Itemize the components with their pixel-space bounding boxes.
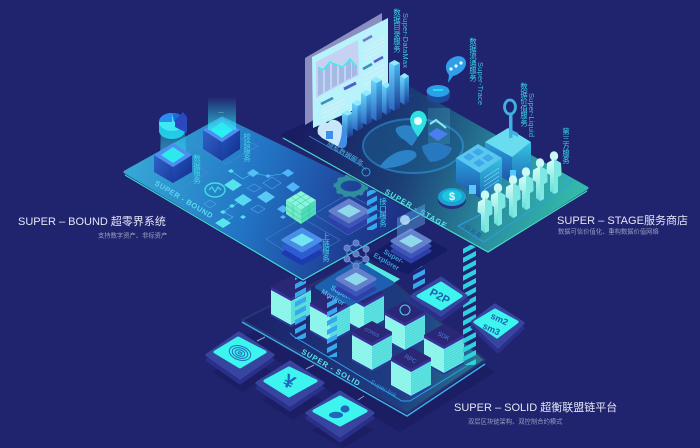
server 1 — [271, 276, 311, 327]
label: 接口服务: 口 — [379, 204, 387, 213]
server labels: RPC — [403, 354, 418, 366]
label: Super-Monitor: Super- — [329, 285, 352, 302]
label: 接口服务: 接 — [379, 197, 387, 206]
label: 数据流通服务: 数 — [469, 37, 477, 46]
label: 数据目录服务: 据 — [393, 15, 401, 24]
server P — [385, 301, 425, 352]
subtitle: 双层区块链架构、双控制合约模式 — [468, 416, 563, 426]
label: 第三方服务: 三 — [562, 134, 570, 143]
label: 校验服务: 验 — [243, 139, 251, 148]
label: Super-Liquid: Super-Liquid — [527, 93, 536, 137]
outline strip — [309, 136, 366, 170]
bar: teal link between pads — [361, 262, 400, 284]
panel: SUPER-SOLID platform — [238, 258, 495, 432]
label: privacy data service: 隐私数据服务 — [325, 139, 365, 168]
label: 数据目录服务: 数 — [393, 8, 401, 17]
stack: interface service — [330, 200, 368, 232]
server 3 — [344, 282, 384, 333]
label: 数据流通服务: 通 — [469, 59, 477, 68]
label: 数据流通服务: 服 — [469, 66, 477, 75]
label: 校验服务: 服 — [243, 147, 251, 156]
label: 第三方服务: 务 — [562, 156, 570, 165]
icon: stripe column interface — [367, 190, 377, 230]
icon: molecule — [344, 240, 369, 269]
icon: building A — [456, 144, 502, 198]
subtitle: 数据可信价值化、重构数据价值网络 — [558, 226, 659, 236]
label: 接口服务: 服 — [379, 212, 387, 221]
label: 校验服务: 校 — [243, 132, 251, 141]
label: 数据价值服务: 务 — [520, 118, 528, 128]
stack — [392, 230, 430, 262]
icon: location pin — [410, 111, 427, 137]
label: 校验服务: 务 — [243, 154, 251, 163]
icon: developers group — [478, 151, 562, 233]
icon: dashboard — [305, 13, 388, 128]
label: SUPER - SOLID: SUPER - SOLID — [300, 347, 362, 388]
icon: fingerprint chip — [207, 333, 273, 392]
label: Super-DataMax: Super-DataMax — [401, 13, 410, 68]
label: 数据目录服务: 目 — [393, 23, 401, 32]
icon: message bubble — [446, 56, 466, 83]
label: 数据流通服务: 据 — [469, 44, 477, 53]
label: 数据服务: 务 — [193, 176, 201, 185]
label: 数据流通服务: 流 — [469, 52, 477, 61]
icon: verify cube: … — [218, 109, 224, 115]
server SDK — [424, 324, 464, 375]
label: 第三方服务: 第 — [562, 127, 570, 136]
icon: cylinder — [426, 85, 450, 103]
icon: verify cube — [203, 97, 240, 161]
label: 上链服务: 链 — [322, 239, 330, 248]
text block: SUPER-BOUND — [18, 214, 167, 240]
vertical labels — [193, 8, 570, 263]
server CONSS — [352, 321, 392, 372]
area bars — [318, 60, 357, 96]
developer outline — [458, 174, 572, 242]
logo circle — [205, 183, 225, 197]
logo mark — [209, 187, 221, 192]
label: 数据服务: 据 — [193, 161, 201, 170]
label: developer: 开发者 — [463, 223, 484, 241]
label: 数据价值服务: 数 — [520, 82, 528, 91]
label: Super-Trace: Super-Trace — [476, 62, 485, 105]
text block: SUPER-STAGE — [557, 213, 688, 236]
subtitle: 支持数字资产、非标资产 — [98, 230, 167, 240]
chart: 3D bars — [342, 60, 409, 138]
icon: dollar coin: $ — [449, 191, 455, 203]
label: Super-Monitor: Monitor — [320, 289, 346, 308]
label: SUPER - STAGE: SUPER - STAGE — [383, 187, 448, 230]
label: Super-link: Super-link — [369, 379, 398, 400]
label: 数据服务: 数 — [193, 154, 201, 163]
stack — [337, 268, 375, 300]
heading: SUPER – SOLID 超衡联盟链平台 — [454, 400, 617, 414]
label: 数据目录服务: 服 — [393, 37, 401, 46]
panel: Super-Explorer pad — [370, 230, 445, 273]
heading: SUPER – BOUND 超零界系统 — [18, 214, 166, 228]
icon: dollar coin — [438, 188, 466, 209]
icon: data cube — [154, 128, 192, 183]
stripe columns — [295, 245, 476, 365]
text lines — [322, 37, 385, 118]
icon: explorer card — [397, 204, 425, 238]
label: 上链服务: 务 — [322, 254, 330, 263]
label: 第三方服务: 方 — [562, 142, 570, 151]
icon: gear — [335, 176, 367, 196]
icon: sm2 sm3 chip: sm2 — [489, 311, 510, 327]
icon: yen chip — [257, 362, 323, 420]
label: 数据价值服务: 价 — [520, 97, 528, 106]
tag — [344, 83, 356, 89]
icon: green blocks — [286, 191, 316, 224]
icon: yen chip: ¥ — [279, 371, 299, 394]
icon: P2P chip: P2P — [428, 287, 452, 307]
label: Super-Explorer: Super- — [382, 249, 405, 266]
label: 接口服务: 务 — [379, 219, 387, 228]
outlines on platform — [138, 130, 385, 262]
icon: person chip — [307, 392, 373, 448]
line — [318, 59, 357, 70]
label: SUPER - BOUND: SUPER - BOUND — [153, 179, 215, 221]
server RPC — [391, 347, 431, 398]
icon: P2P chip — [410, 278, 468, 320]
server labels: CONSS — [364, 326, 380, 338]
illustration: globe — [363, 96, 463, 173]
panel: SUPER-BOUND platform — [125, 118, 420, 282]
icon: sm2 sm3 chip: sm3 — [481, 321, 502, 337]
label: 第三方服务: 服 — [562, 149, 570, 158]
label: 数据价值服务: 据 — [520, 89, 528, 98]
server labels — [364, 305, 450, 366]
chips — [215, 169, 300, 228]
icon: building B — [485, 128, 531, 183]
label: 数据服务: 服 — [193, 169, 201, 178]
icon: sm2 sm3 chip — [472, 305, 523, 352]
label: 数据流通服务: 务 — [469, 74, 477, 82]
label: 上链服务: 服 — [322, 247, 330, 256]
label: 数据目录服务: 务 — [393, 44, 401, 54]
icon: key — [504, 100, 518, 138]
chart panel — [316, 40, 359, 98]
stack: chain service — [283, 229, 321, 264]
text block: SUPER-SOLID — [454, 400, 617, 426]
connector lines — [257, 337, 364, 400]
panel: Super-Monitor pad — [317, 262, 392, 309]
label: 上链服务: 上 — [322, 232, 330, 241]
label: 数据价值服务: 值 — [520, 104, 528, 113]
panel: SUPER-STAGE platform — [283, 80, 587, 254]
server labels: SDK — [436, 331, 450, 342]
icon: cloud — [318, 120, 347, 148]
label: Super-Explorer: Explorer — [372, 252, 400, 272]
circuit lines — [223, 171, 288, 223]
server 2 — [310, 292, 350, 343]
label: 数据价值服务: 服 — [520, 111, 528, 120]
icon: pie chart — [159, 112, 187, 152]
chart group: servers — [271, 276, 464, 398]
icon: translucent block — [428, 108, 450, 144]
heading: SUPER – STAGE服务商店 — [557, 213, 688, 227]
label: 数据目录服务: 录 — [393, 30, 401, 39]
